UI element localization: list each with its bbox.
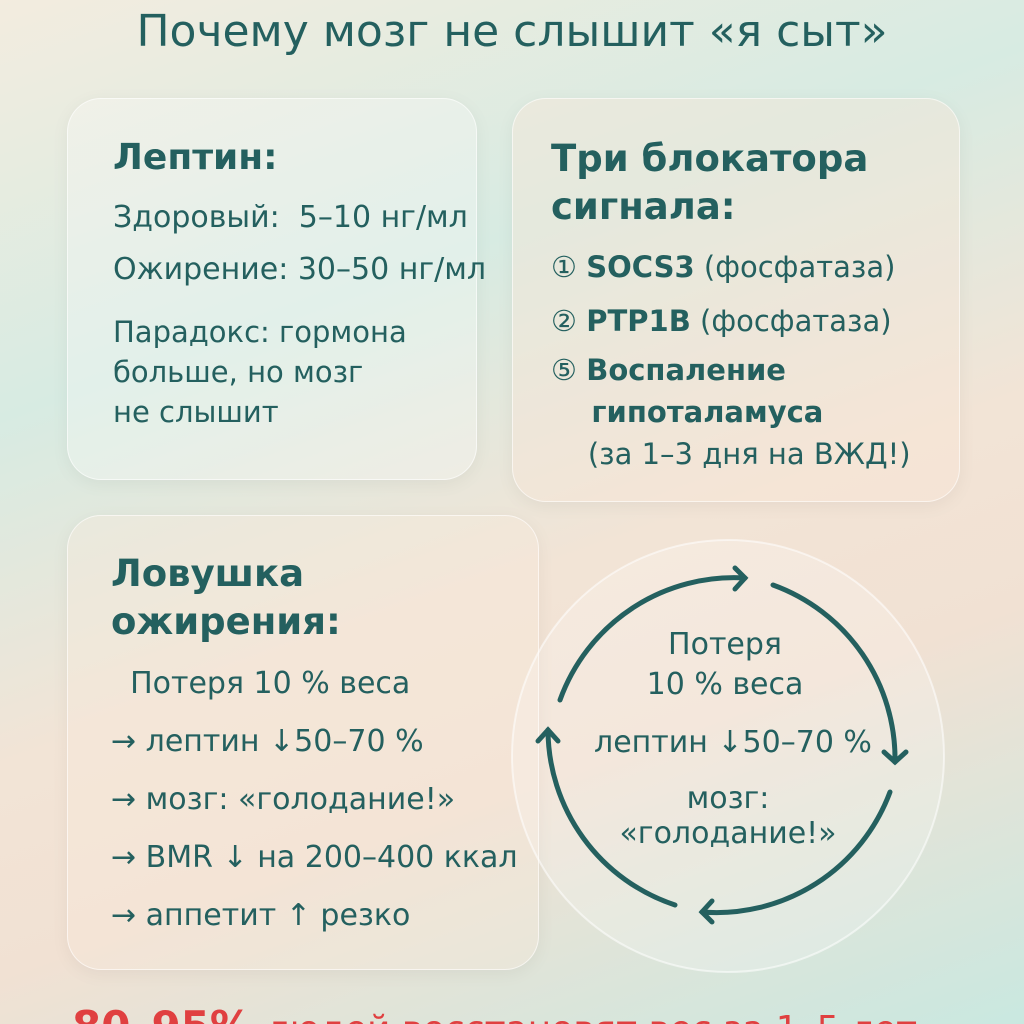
list: trap steps bbox=[111, 666, 518, 933]
list: trap steps: → мозг: «голодание!» bbox=[111, 782, 455, 817]
heading: trap: Ловушка bbox=[111, 552, 304, 595]
heading: blockers: сигнала: bbox=[551, 185, 736, 228]
panel: blockers bbox=[512, 98, 960, 502]
heading: trap bbox=[111, 552, 341, 643]
panel: leptin bbox=[67, 98, 477, 480]
panel: trap bbox=[67, 515, 539, 970]
heading: blockers bbox=[551, 137, 868, 228]
cycle diagram: «голодание!» bbox=[619, 816, 837, 851]
text: paradox: не слышит bbox=[113, 395, 279, 429]
list: blockers: ② PTP1B (фосфатаза) bbox=[551, 304, 892, 338]
text: levels: Ожирение: 30–50 нг/мл bbox=[113, 252, 486, 287]
list: blockers: ⑤ Воспаление bbox=[551, 353, 786, 387]
cycle diagram: Потеря bbox=[668, 627, 782, 662]
list: trap steps: → аппетит ↑ резко bbox=[111, 898, 410, 933]
list: blockers: гипоталамуса bbox=[591, 395, 823, 429]
text: paradox bbox=[113, 315, 407, 429]
list: trap steps: Потеря 10 % веса bbox=[130, 666, 410, 701]
heading: trap: ожирения: bbox=[111, 600, 341, 643]
list: blockers bbox=[551, 250, 911, 471]
cycle diagram: 10 % веса bbox=[647, 667, 803, 702]
cycle diagram: лептин ↓50–70 % bbox=[594, 725, 872, 760]
list: blockers: (за 1–3 дня на ВЖД!) bbox=[588, 437, 911, 471]
title: Почему мозг не слышит «я сыт» bbox=[136, 6, 888, 57]
heading: leptin: Лептин: bbox=[113, 137, 278, 178]
text: paradox: Парадокс: гормона bbox=[113, 315, 407, 349]
list: trap steps: → лептин ↓50–70 % bbox=[111, 724, 424, 759]
cycle diagram: мозг: bbox=[687, 781, 769, 816]
list: blockers: ① SOCS3 (фосфатаза) bbox=[551, 250, 895, 284]
heading: blockers: Три блокатора bbox=[551, 137, 868, 180]
list: trap steps: → BMR ↓ на 200–400 ккал bbox=[111, 840, 518, 875]
text: levels: Здоровый: 5–10 нг/мл bbox=[113, 200, 468, 235]
text: paradox: больше, но мозг bbox=[113, 355, 363, 389]
text: levels bbox=[113, 200, 486, 287]
